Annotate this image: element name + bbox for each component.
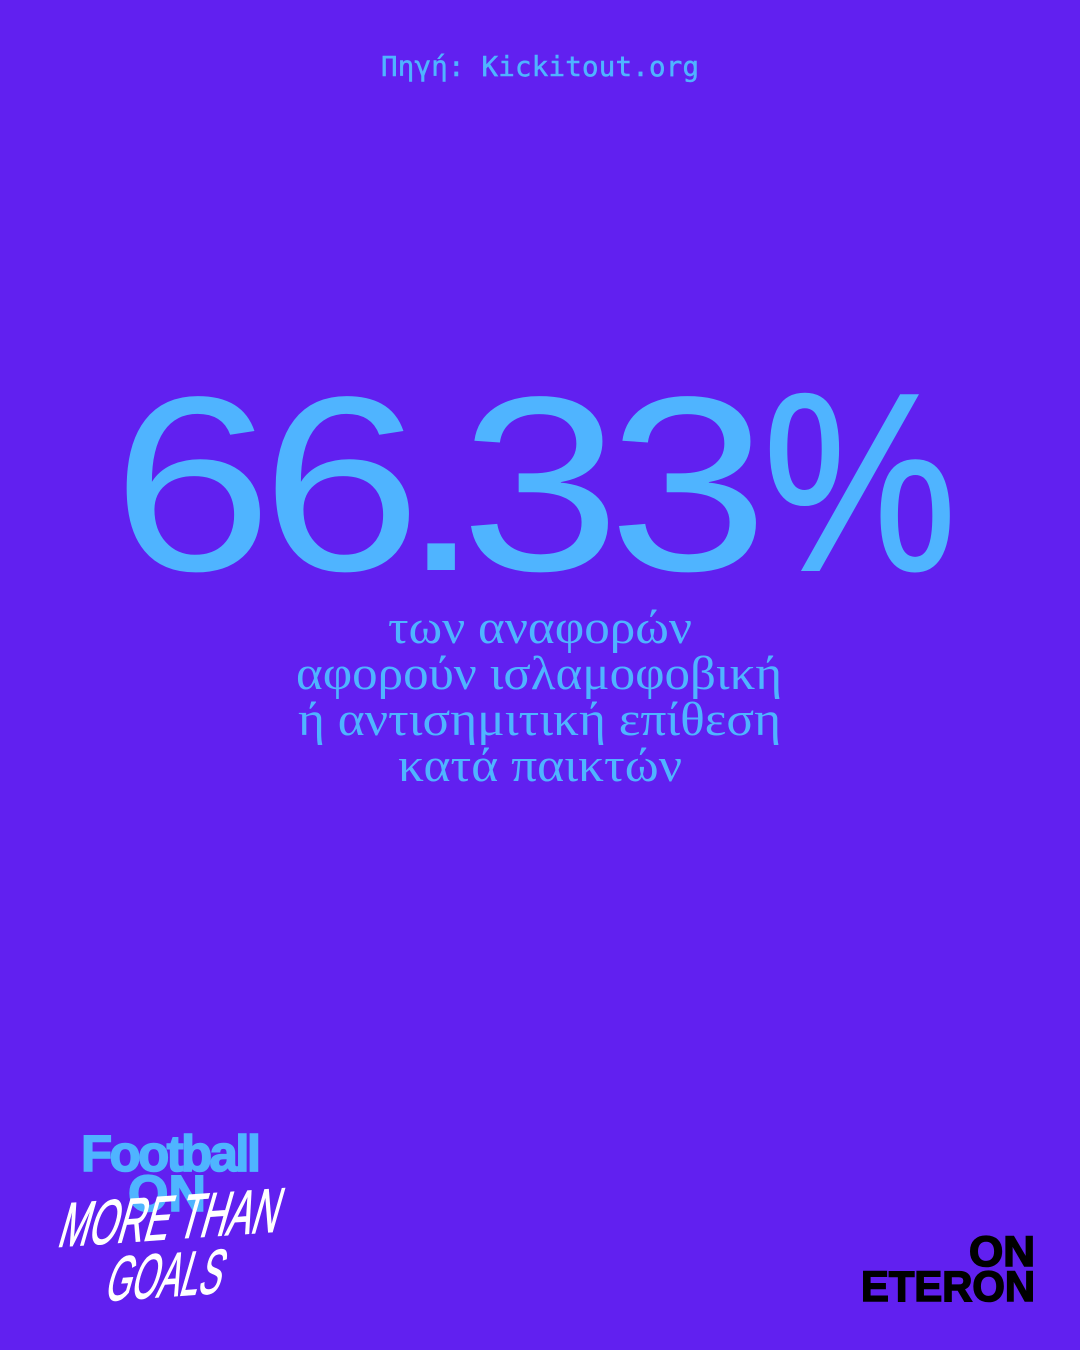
big percentage	[112, 341, 957, 625]
big percentage: 6	[261, 346, 422, 624]
description text: ή αντισημιτική επίθεση	[298, 693, 781, 746]
big percentage: 6	[112, 346, 273, 624]
description text: κατά παικτών	[398, 739, 682, 792]
logo script: More Than: MORE THAN	[52, 1174, 292, 1261]
big percentage: .	[401, 346, 481, 624]
logo wordmark: Football: Football	[81, 1125, 261, 1182]
logo word: ON: ON	[969, 1228, 1035, 1276]
description text	[296, 601, 782, 792]
big percentage: 3	[608, 346, 769, 624]
description text: των αναφορών	[388, 601, 692, 654]
big percentage: 3	[460, 346, 621, 624]
logo word: ETERON: ETERON	[861, 1263, 1035, 1311]
logo: On Eteron	[861, 1228, 1035, 1311]
description text: αφορούν ισλαμοφοβική	[296, 647, 782, 700]
logo script: Goals: GOALS	[99, 1235, 235, 1315]
logo wordmark: ON: ON	[128, 1165, 206, 1222]
logo: Football ON More Than Goals	[52, 1125, 292, 1315]
big percentage: %	[763, 341, 957, 625]
source line: Πηγή: Kickitout.org	[381, 51, 699, 83]
